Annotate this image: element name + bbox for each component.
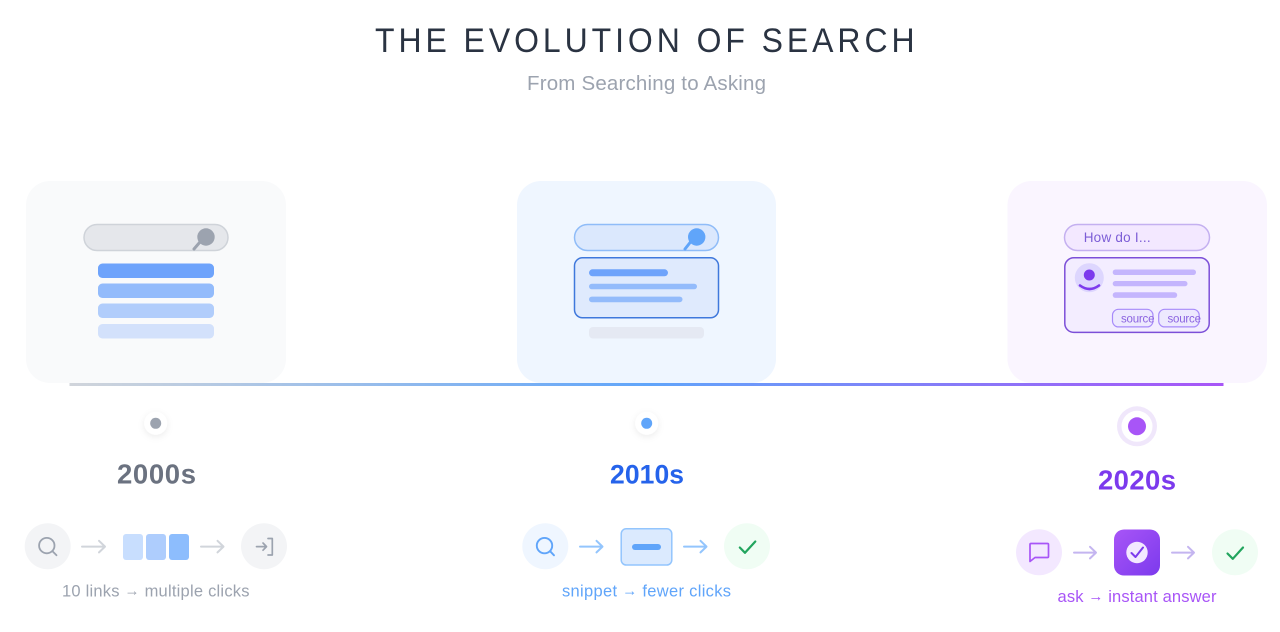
panel: 2000s search results	[26, 181, 286, 383]
search bar 2000s	[84, 224, 228, 250]
icon: check	[724, 523, 770, 569]
panel: 2010s featured snippet	[517, 181, 776, 383]
caption 2020s: instant answer	[1103, 588, 1217, 606]
arrow	[1172, 547, 1194, 558]
caption 2010s: fewer clicks	[638, 582, 731, 600]
icon: chat bubble	[1016, 529, 1062, 575]
arrow	[684, 541, 706, 552]
title: THE EVOLUTION OF SEARCH	[375, 21, 915, 59]
faded result	[589, 327, 704, 338]
answer card	[1065, 258, 1209, 332]
list of result links	[98, 264, 214, 338]
timeline dot 2020s	[1117, 406, 1157, 446]
source chip 1	[1112, 309, 1154, 327]
arrow	[201, 541, 224, 552]
panel: 2020s AI answer	[1008, 181, 1267, 383]
year 2020s: 2020s	[1098, 464, 1176, 496]
caption 2000s: →	[125, 582, 140, 600]
arrow	[82, 541, 105, 552]
icon: instant answer	[1114, 530, 1160, 576]
arrow	[1074, 547, 1096, 558]
subtitle: From Searching to Asking	[527, 72, 766, 95]
icon: snippet box	[621, 529, 672, 565]
question bar	[1064, 224, 1210, 250]
flow: 2010s	[522, 523, 770, 569]
timeline dot 2010s	[635, 412, 658, 435]
source chip 2: source	[1168, 314, 1201, 326]
flow: 2020s	[1016, 529, 1258, 576]
year 2000s: 2000s	[117, 458, 196, 490]
snippet box	[574, 258, 718, 318]
source chip 2	[1159, 309, 1201, 327]
icon: search	[25, 523, 71, 569]
question bar: How do I...	[1084, 230, 1151, 245]
caption 2000s: 10 links	[62, 582, 120, 600]
icon: check	[1212, 529, 1258, 575]
icon: three link blocks	[123, 534, 189, 560]
icon: search	[522, 523, 568, 569]
search bar 2010s	[574, 224, 718, 250]
caption 2000s: multiple clicks	[140, 582, 250, 600]
source chip 1: source	[1121, 314, 1154, 326]
avatar	[1075, 263, 1104, 292]
timeline dot 2000s	[144, 412, 167, 435]
arrow	[580, 541, 602, 552]
caption 2020s: ask	[1058, 588, 1083, 606]
caption 2020s: →	[1088, 588, 1103, 605]
icon: enter site	[241, 523, 287, 569]
timeline line	[70, 383, 1224, 386]
answer lines	[1113, 270, 1196, 298]
year 2010s: 2010s	[610, 460, 684, 490]
flow: 2000s	[25, 523, 287, 569]
caption 2010s: →	[622, 582, 637, 600]
caption 2010s: snippet	[562, 582, 617, 600]
